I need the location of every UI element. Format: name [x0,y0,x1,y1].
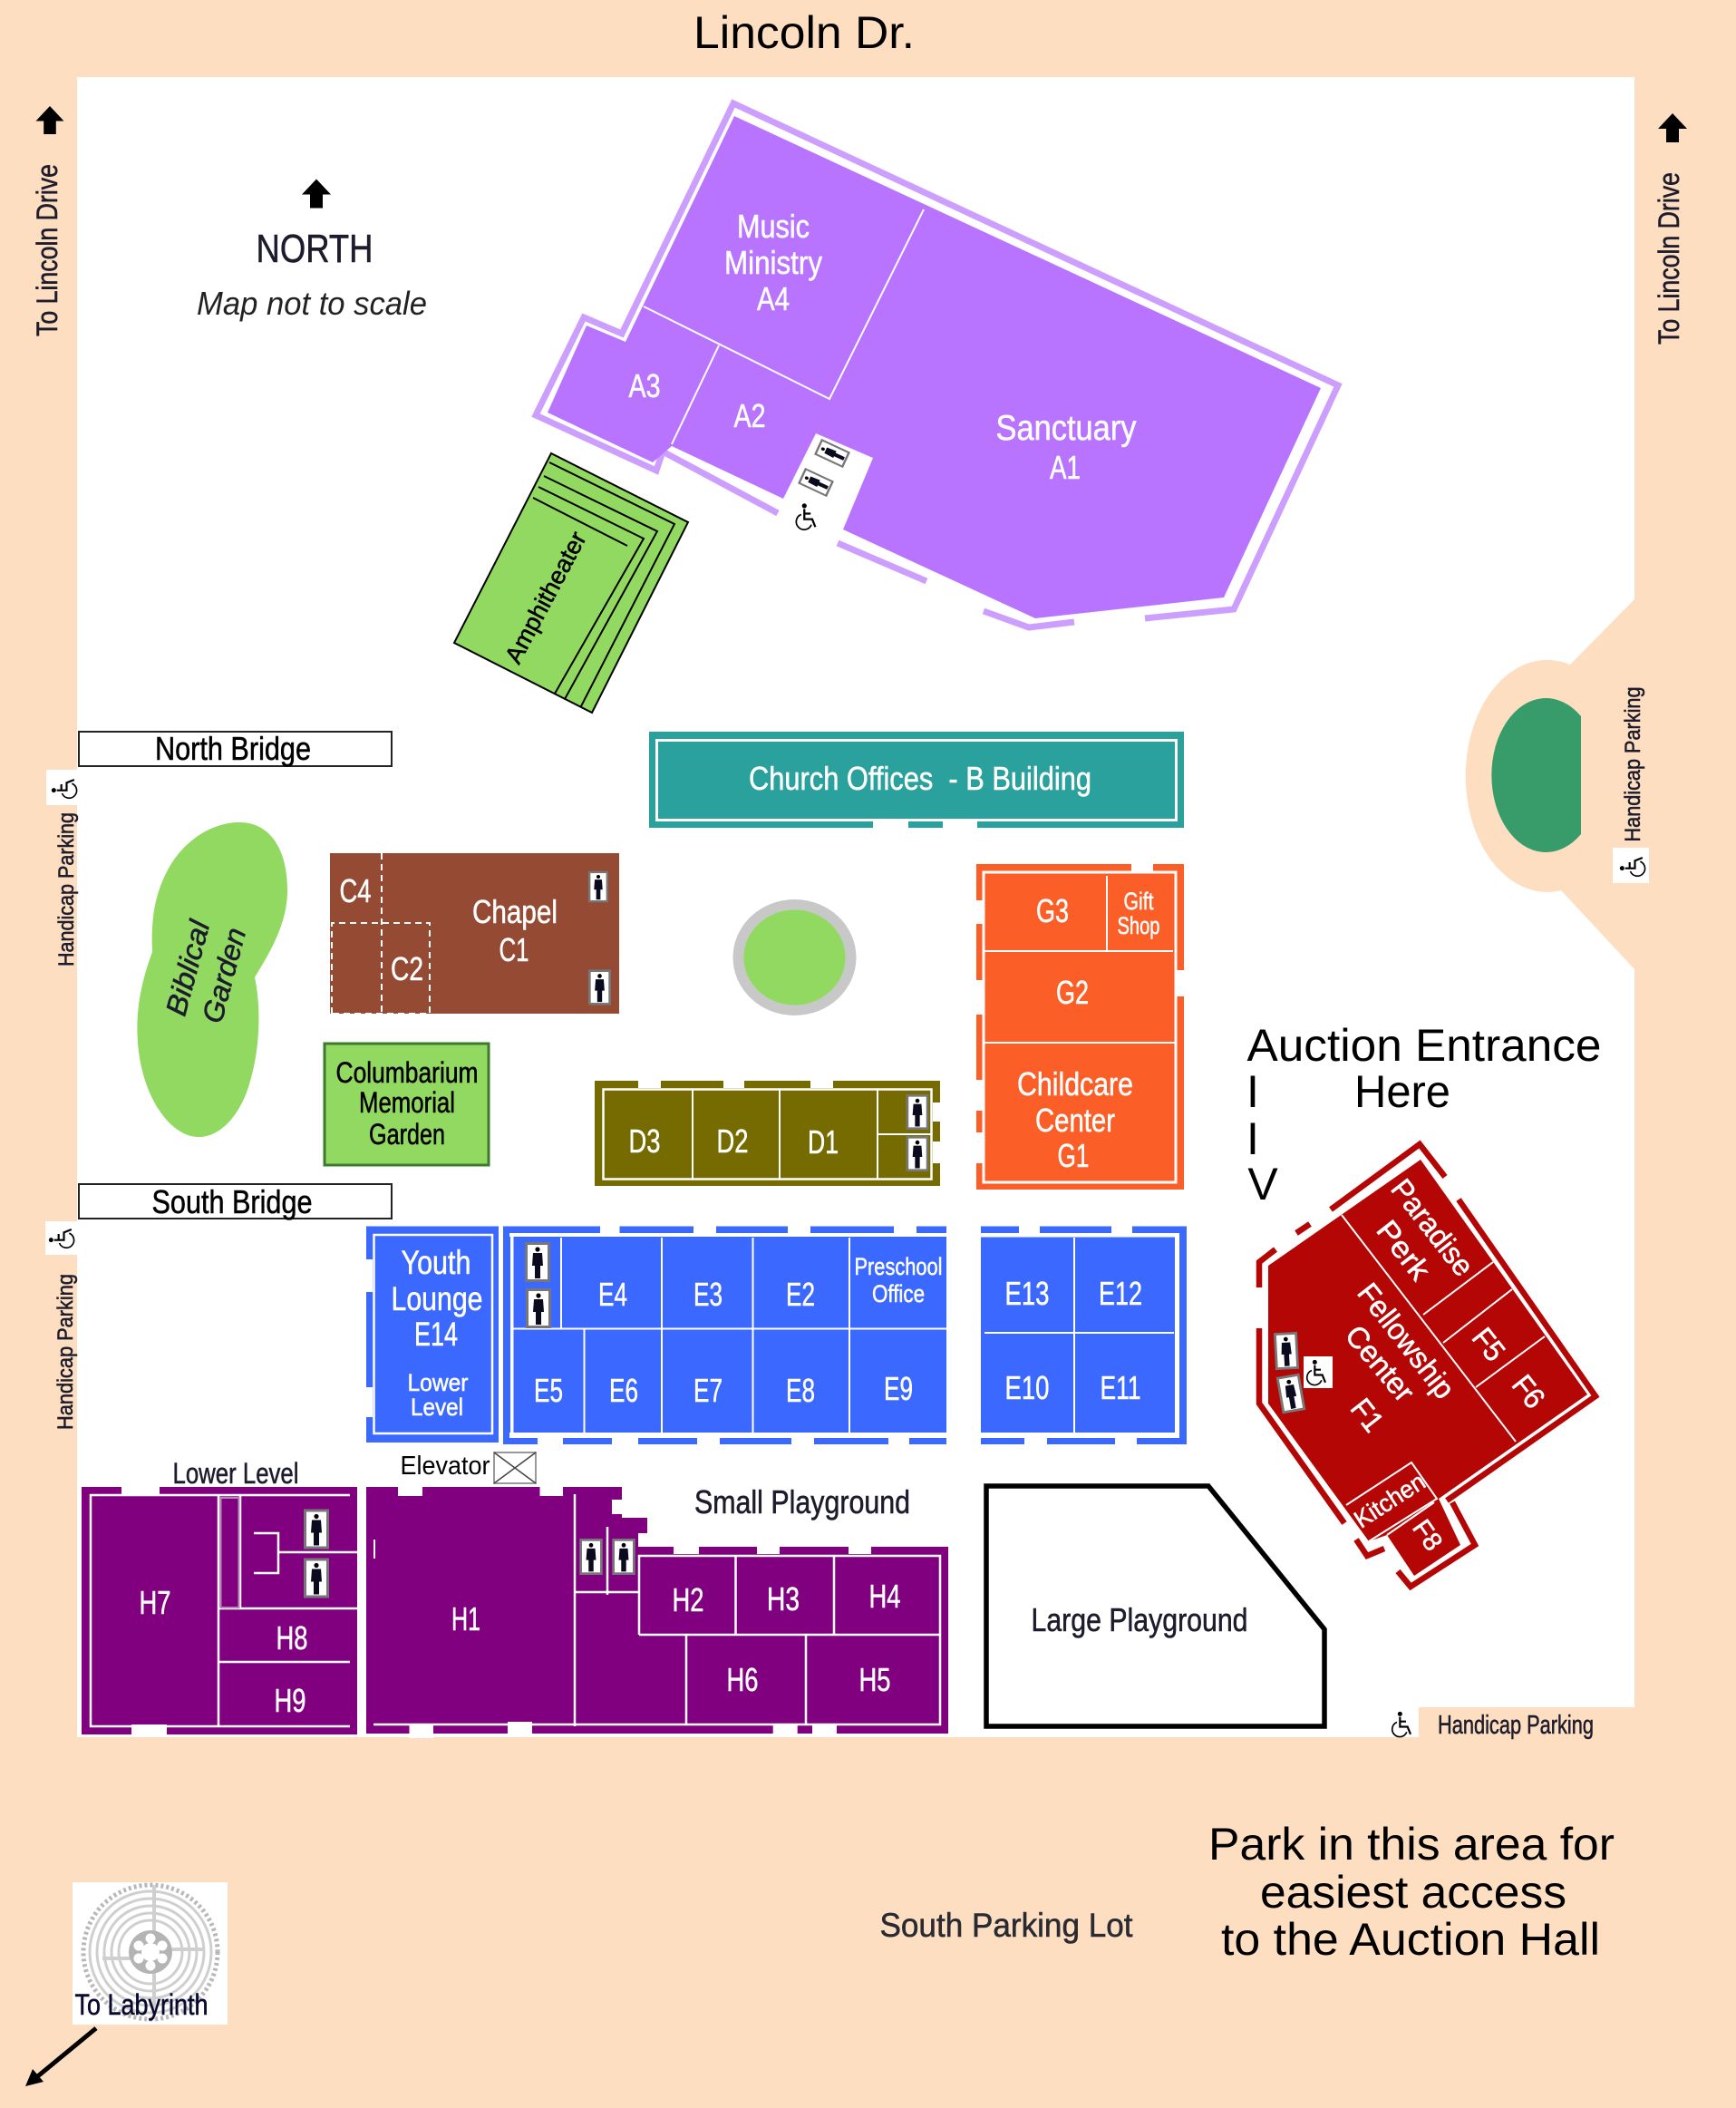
wall openings [538,1226,916,1445]
building E: main wing: E7 [693,1372,723,1409]
building H: main wing: H2 [673,1581,703,1618]
arrow: to labyrinth [25,2028,96,2086]
building H: main wing: H3 [767,1580,800,1617]
building E: main wing: E3 [693,1276,723,1313]
building H: west wing: H9 [274,1682,306,1719]
north bridge: North Bridge [155,730,311,767]
pond / round garden [732,899,856,1015]
room labels: A4 [757,280,790,317]
elevator: Elevator [401,1452,490,1481]
room labels: F8 [1406,1514,1448,1557]
columbarium memorial garden: Garden [369,1118,445,1151]
labyrinth [73,1882,228,2025]
parking note: Park in this area for [1208,1819,1615,1870]
room labels: Music [737,208,810,245]
handicap parking east [1613,687,1649,883]
street label: Lincoln Dr.: Lincoln Dr. [693,7,915,58]
elevator [401,1452,536,1483]
room labels: Sanctuary [995,409,1137,448]
building C: chapel: Chapel [472,893,558,930]
youth lounge E14: Level [411,1394,463,1421]
room labels [629,208,1137,486]
youth lounge E14 [365,1226,499,1443]
wall openings [373,1486,871,1738]
outer walls [1259,1144,1595,1587]
building B: church offices [649,732,1184,829]
youth lounge E14: E14 [414,1316,458,1353]
large playground: Large Playground [1032,1601,1247,1638]
handicap parking south-east: Handicap Parking [1438,1711,1594,1740]
north bridge [79,730,392,767]
building G: childcare center: Center [1035,1102,1115,1139]
wall openings [975,863,1185,1163]
biblical garden: Biblical [160,916,217,1019]
building H: main wing: H4 [868,1578,901,1615]
building E: east wing: E10 [1004,1369,1050,1406]
building C: chapel: C4 [339,872,372,909]
room labels: F5 [1466,1321,1512,1367]
north indicator: NORTH [256,227,373,271]
large playground [986,1486,1324,1726]
sanctuary floor [548,116,1321,618]
youth lounge E14: Lounge [392,1280,482,1317]
building E: main wing: Preschool [854,1253,943,1280]
room labels: Kitchen [1349,1468,1431,1533]
parking note [1208,1819,1615,1965]
building G: childcare center: Gift [1124,888,1154,915]
floor [1268,1160,1587,1576]
building D: D3 [629,1122,660,1160]
room labels: F1 [1344,1392,1391,1438]
building E: main wing: E6 [609,1372,638,1409]
room labels: F6 [1506,1368,1552,1414]
building E: main wing: E8 [786,1372,815,1409]
building C: chapel [330,853,619,1014]
building B: church offices: Church Offices - B Building [749,760,1091,797]
building H: west wing: H7 [140,1584,170,1621]
room labels: A2 [734,397,765,434]
amphitheater: Amphitheater [499,527,592,668]
parking note: to the Auction Hall [1221,1914,1600,1965]
columbarium memorial garden: Columbarium [335,1056,479,1089]
outer wall [536,103,1338,627]
building C: chapel: C1 [499,931,529,968]
columbarium memorial garden [325,1044,489,1165]
youth lounge E14: Lower [408,1369,468,1396]
columbarium memorial garden: Memorial [359,1086,455,1119]
building E: main wing: Office [872,1280,925,1307]
youth lounge E14: Youth [401,1244,471,1281]
room labels: A1 [1050,449,1081,486]
auction entrance note: V [1247,1159,1278,1209]
room labels: Ministry [724,244,822,281]
icons: restrooms and access [796,440,849,529]
north indicator: Map not to scale [197,285,427,322]
building E: main wing: E4 [598,1276,627,1313]
room labels: Paradise [1384,1172,1480,1282]
handicap parking south-west [45,1221,78,1430]
building G: childcare center: Childcare [1017,1065,1133,1103]
building G: childcare center: G3 [1036,892,1069,929]
building E: main wing: E5 [534,1372,563,1409]
auction entrance note: Here [1354,1066,1450,1117]
small playground label: Small Playground [694,1483,910,1520]
room dividers [644,209,924,444]
building G: childcare center: G1 [1057,1137,1090,1174]
building H: main wing [366,1486,948,1738]
room labels: A3 [629,367,660,404]
building E: main wing: E9 [884,1370,913,1407]
building D [595,1080,941,1186]
south parking lot label: South Parking Lot [879,1907,1133,1944]
biblical garden [137,822,287,1137]
direction: To Lincoln Drive right: To Lincoln Drive [1653,172,1685,345]
auction entrance note: I [1246,1066,1259,1117]
building H: west wing: H8 [276,1619,308,1656]
lower level label: Lower Level [172,1457,299,1490]
handicap parking north-west [46,770,79,967]
building G: childcare center [975,863,1185,1190]
campus grounds [77,77,1634,1737]
building H: main wing: H5 [859,1661,890,1698]
room dividers [1342,1215,1545,1541]
building G: childcare center: G2 [1056,974,1089,1011]
handicap parking north-west: Handicap Parking [54,812,79,967]
auction entrance note: I [1246,1113,1259,1164]
amphitheater [454,453,688,713]
north indicator [197,180,427,322]
auction entrance note: Auction Entrance [1247,1020,1601,1071]
handicap parking east: Handicap Parking [1621,687,1645,841]
handicap parking south-east [1392,1707,1634,1740]
building E: main wing [503,1226,947,1445]
handicap parking south-west: Handicap Parking [53,1274,78,1430]
room labels: Fellowship [1351,1277,1461,1405]
east drive circle [1466,599,1634,969]
icons: restrooms and access [1275,1333,1333,1413]
parking note: easiest access [1260,1867,1566,1918]
building D: D1 [808,1123,839,1161]
building E: east wing [981,1226,1187,1445]
direction: To Lincoln Drive left: To Lincoln Drive [31,164,63,336]
building H: main wing: H1 [451,1600,480,1637]
building H: main wing: H6 [727,1661,758,1698]
building H: west wing [82,1486,357,1736]
building E: main wing: E2 [786,1276,815,1313]
labyrinth: To Labyrinth [74,1988,209,2021]
building E: east wing: E12 [1099,1275,1142,1312]
auction entrance note [1246,1020,1601,1209]
south bridge [79,1183,392,1220]
building D: D2 [716,1122,749,1160]
wall openings [638,1080,941,1163]
building G: childcare center: Shop [1117,912,1160,939]
room labels [1339,1172,1552,1557]
room labels: Perk [1370,1214,1438,1287]
south bridge: South Bridge [152,1183,312,1220]
building E: east wing: E13 [1004,1275,1050,1312]
building C: chapel: C2 [391,950,423,987]
biblical garden: Garden [196,924,252,1026]
island [1491,698,1581,852]
building A: sanctuary [536,103,1338,627]
building E: east wing: E11 [1101,1369,1140,1406]
room labels: Center [1339,1318,1421,1408]
building F: fellowship center [1259,1144,1595,1587]
